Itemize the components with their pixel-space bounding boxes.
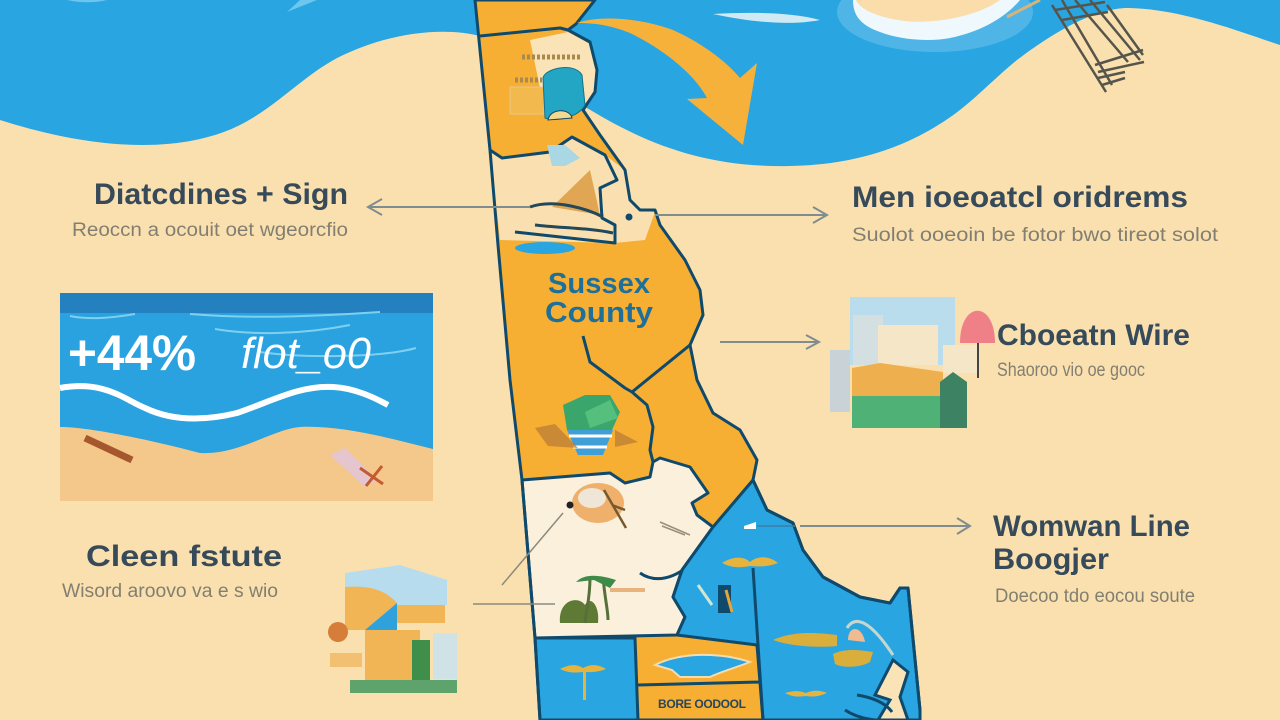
island with white shore <box>837 0 1033 52</box>
callout: top right: Men ioeoatcl oridrems <box>852 181 1188 214</box>
icon: palm tree <box>560 576 645 623</box>
icon: pier tower <box>1052 0 1144 92</box>
callout: top right: Suolot ooeoin be fotor bwo tireot solot <box>852 225 1219 246</box>
thin line in blue county <box>757 525 795 527</box>
icon: sail and coast <box>515 145 632 254</box>
icon: blue county island scene <box>773 621 908 720</box>
icon: green gem on bowl <box>535 395 638 455</box>
map: county dividers <box>480 28 763 720</box>
icon: yellow palms on blue <box>560 557 827 700</box>
icon: beach building <box>510 57 585 120</box>
panel: beach photo <box>60 293 433 501</box>
callout: lower right: Doecoo tdo eocou soute <box>995 586 1195 607</box>
callout: top left <box>72 178 348 241</box>
icon: starfish <box>360 466 383 486</box>
callout: lower left <box>62 540 282 602</box>
map: blue east county <box>673 480 920 720</box>
icon: bottom islet <box>655 655 750 677</box>
map label: Sussex County: County <box>545 297 653 329</box>
callout: lower right: Boogjer <box>993 543 1109 576</box>
arrow: top left <box>368 199 530 215</box>
map: outline <box>475 0 920 720</box>
small marks in cream county <box>660 522 690 535</box>
light streaks in sea <box>67 0 317 12</box>
arrow: orange swoosh <box>577 19 757 145</box>
map: cream county <box>522 458 713 638</box>
map: beige county <box>490 137 655 243</box>
callout: top left: Diatcdines + Sign <box>94 178 348 211</box>
arrow: middle right <box>720 335 819 349</box>
icon: lilac bottle <box>330 448 378 487</box>
photo text: +44% <box>68 325 196 381</box>
callout: lower left: Cleen fstute <box>86 540 282 573</box>
icon: tool in blue county <box>698 585 732 613</box>
beige shape in upper county <box>530 32 596 112</box>
callout: top right <box>852 181 1219 246</box>
icon: small white marker <box>744 522 756 529</box>
callout: middle right: Cboeatn Wire <box>997 319 1190 352</box>
callout: lower left: Wisord aroovo va e s wio <box>62 581 278 602</box>
callout: top left: Reoccn a ocouit oet wgeorcfio <box>72 220 348 241</box>
icon: bottle <box>85 438 132 460</box>
callout: middle right <box>997 319 1190 381</box>
icon: lower left collage <box>328 565 457 693</box>
callout: lower right <box>993 510 1195 607</box>
map of Delaware <box>475 0 920 720</box>
arrow: lower left <box>473 513 563 604</box>
callout: lower right: Womwan Line <box>993 510 1190 543</box>
callout: middle right: Shaoroo vio oe gooc <box>997 360 1145 381</box>
tan streak <box>1007 0 1040 17</box>
icon: city collage <box>830 297 995 428</box>
sea wave: top band <box>0 0 1280 166</box>
arrow: lower right <box>800 518 970 534</box>
white streak in sea <box>713 13 820 23</box>
arrow: top right <box>655 207 827 223</box>
map label: Sussex County <box>545 268 653 329</box>
map: bottom left county <box>535 638 638 720</box>
map label: Sussex County: Sussex <box>548 268 650 300</box>
map: orange base <box>475 0 920 720</box>
photo text 2: flot_o0 <box>241 329 372 378</box>
bottom county caption: BORE OODOOL <box>658 697 746 711</box>
icon: balloon <box>566 483 626 528</box>
